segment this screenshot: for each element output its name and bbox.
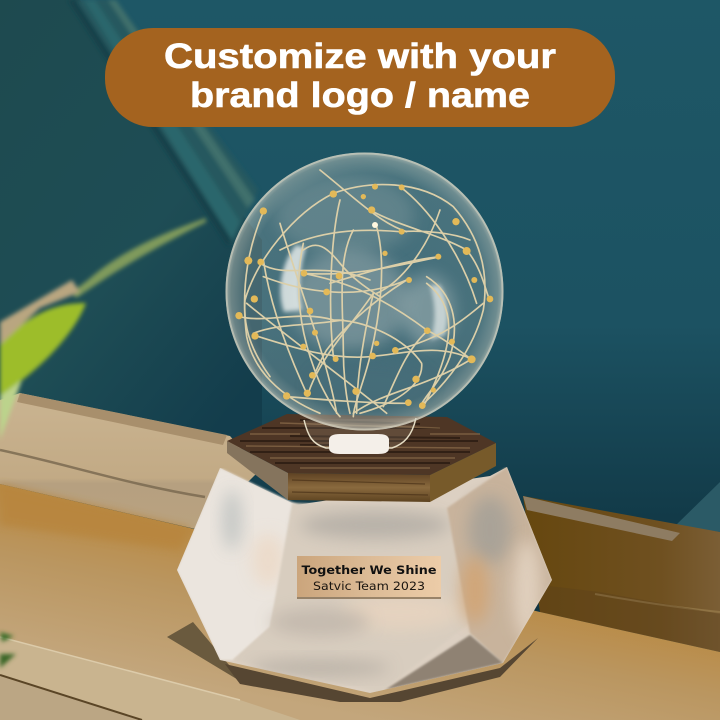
diagonal wall moulding (68, 0, 258, 246)
plaque: engraved name: Together We Shine (302, 563, 437, 577)
concrete hexagonal base (177, 467, 552, 693)
plaque: engraved name: Satvic Team 2023 (313, 579, 425, 593)
center facet (235, 502, 382, 692)
sparkle (372, 222, 378, 228)
title banner: brand logo / name (190, 76, 530, 115)
sphere rim (226, 154, 502, 430)
white bulb socket (329, 434, 389, 454)
hexagonal wood plinth (227, 414, 496, 502)
wooden shelf top surface (0, 484, 720, 720)
LED beads (235, 184, 493, 409)
left facet (177, 468, 298, 660)
bulb neck (304, 418, 416, 448)
title banner (105, 28, 615, 127)
shadowed lower facet (385, 635, 503, 690)
blurred plant leaf (0, 218, 206, 668)
wooden shelf back plank (0, 393, 720, 652)
glass sphere (226, 152, 504, 430)
glass globe with fairy lights (226, 152, 504, 454)
plaque: engraved name (297, 556, 441, 599)
front lip (0, 637, 300, 720)
title banner: Customize with your (164, 37, 556, 76)
shelf shadow under base (167, 622, 245, 684)
glass reflections (274, 173, 460, 356)
wires (240, 170, 490, 417)
right plank (523, 496, 720, 652)
right facet (447, 467, 552, 663)
